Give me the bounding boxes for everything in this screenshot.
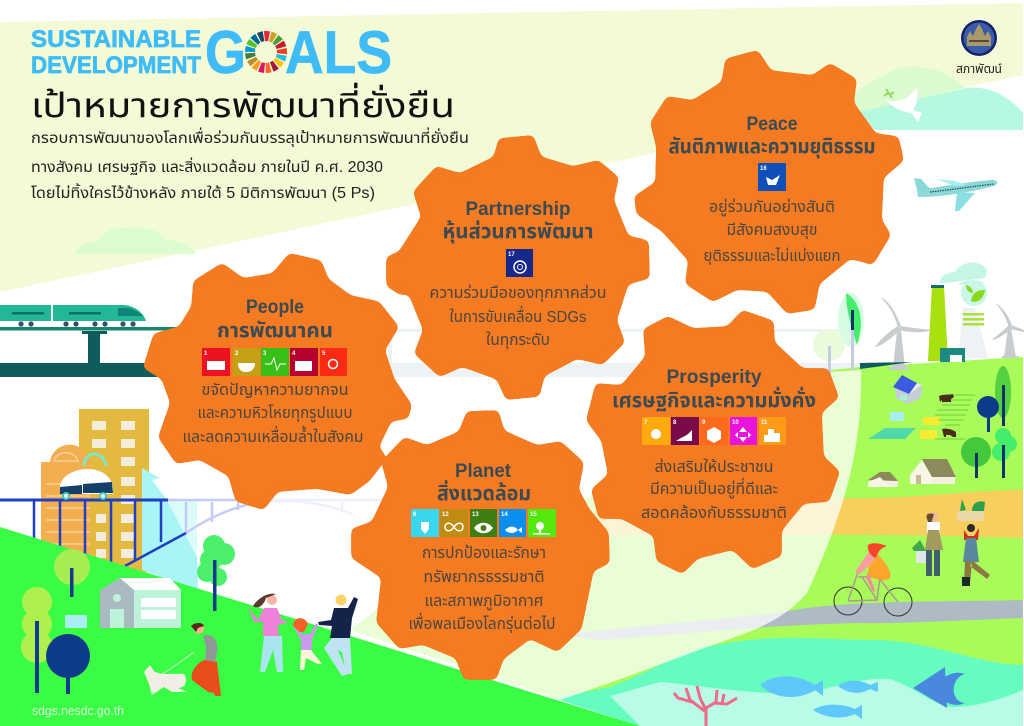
intro text: ทางสังคม เศรษฐกิจ และสิ่งแวดล้อม ภายในปี ค.ศ. 2030 <box>31 157 383 176</box>
fish <box>760 676 878 719</box>
clouds: top right hills <box>852 67 1023 130</box>
train <box>0 305 146 327</box>
field band <box>560 490 1023 538</box>
panel: planet: เพื่อพลเมืองโลกรุ่นต่อไป <box>408 612 556 633</box>
panel: planet: Planet <box>455 460 511 482</box>
intro text <box>31 127 469 202</box>
dark viaduct end <box>860 362 912 369</box>
logo: sustainable development goals: SUSTAINABLE <box>31 26 201 53</box>
big fish <box>913 667 965 708</box>
bridge: blue <box>0 498 385 566</box>
panel: peace: มีสังคมสงบสุข <box>726 222 818 239</box>
panel: people: ขจัดปัญหาความยากจน <box>202 382 348 399</box>
panel: partnership: ในการขับเคลื่อน SDGs <box>450 305 586 326</box>
farmer with basket <box>912 512 943 576</box>
gear: people <box>145 255 410 508</box>
panel: planet: ทรัพยากรธรรมชาติ <box>424 569 544 586</box>
farmer with crate <box>957 499 990 586</box>
train viaduct <box>0 327 180 377</box>
panel: peace: ยุติธรรมและไม่แบ่งแยก <box>704 247 840 265</box>
panel: peace: สันติภาพและความยุติธรรม <box>668 136 876 158</box>
logo: sustainable development goals: DEVELOPMENT <box>31 52 201 79</box>
panel: planet <box>408 460 556 633</box>
SDG tiles 6, 12 to 15: 15 <box>530 512 537 518</box>
SDG tiles 6, 12 to 15: 14 <box>501 512 508 518</box>
gear: prosperity <box>588 312 838 572</box>
trees near wind farm <box>813 293 864 376</box>
SDG tiles 7 to 11: 10 <box>732 420 739 426</box>
farm: solar house <box>893 375 922 404</box>
farm: houses <box>868 459 956 487</box>
SDG tiles 7 to 11 <box>642 417 786 445</box>
panel: prosperity: ส่งเสริมให้ประชาชน <box>654 458 774 476</box>
panel: planet: สิ่งแวดล้อม <box>437 480 531 505</box>
intro text: กรอบการพัฒนาของโลกเพื่อร่วมกันบรรลุเป้าหมายการพัฒนาที่ยั่งยืน <box>31 127 469 147</box>
SDG tiles 6, 12 to 15: 13 <box>472 512 479 518</box>
emblem: office of NESDC: สภาพัฒน์ <box>956 62 1002 76</box>
panel: peace: อยู่ร่วมกันอย่างสันติ <box>709 198 835 216</box>
panel: people: People <box>246 296 304 318</box>
SDG tiles 1 to 5 <box>202 348 347 376</box>
wind turbines <box>875 298 1024 370</box>
water: light wave <box>610 679 1023 726</box>
gear: peace <box>636 52 902 312</box>
panel: prosperity <box>612 366 816 522</box>
SDG tiles 7 to 11: 11 <box>761 420 768 426</box>
dog <box>144 665 187 695</box>
farm: fields, crops and cows <box>868 394 975 439</box>
panel: peace <box>668 113 876 265</box>
SDG tiles 7 to 11: 8 <box>673 420 677 426</box>
gear: partnership <box>388 137 648 398</box>
SDG tile 17 <box>506 249 533 277</box>
SDG tiles 1 to 5: 3 <box>263 351 267 357</box>
SDG tile 16 <box>758 163 786 191</box>
gear: planet <box>353 412 608 678</box>
tower building <box>79 409 149 572</box>
panel: people: และลดความเหลื่อมล้ำในสังคม <box>182 425 364 446</box>
dove <box>884 87 922 122</box>
smart car <box>60 454 113 499</box>
logo: sustainable development goals: ALS <box>285 19 392 86</box>
panel: prosperity: Prosperity <box>666 366 762 388</box>
website url: sdgs.nesdc.go.th <box>32 703 124 718</box>
orange building <box>41 445 90 560</box>
panel: partnership <box>430 198 606 349</box>
man walking dog <box>162 623 221 696</box>
SDG tiles 1 to 5: 4 <box>292 351 296 357</box>
trees on hill <box>21 535 235 694</box>
road <box>560 600 1023 640</box>
SDG tiles 7 to 11: 7 <box>644 420 648 426</box>
panel: prosperity: เศรษฐกิจและความมั่งคั่ง <box>612 387 816 412</box>
SDG tiles 1 to 5: 1 <box>204 351 208 357</box>
panel: prosperity: สอดคล้องกับธรรมชาติ <box>641 505 787 522</box>
factory <box>928 263 988 362</box>
house <box>100 578 181 628</box>
family holding hands <box>248 594 358 676</box>
SDG tiles 1 to 5: 2 <box>235 351 239 357</box>
panel: planet: และสภาพภูมิอากาศ <box>424 593 544 610</box>
title: เป้าหมายการพัฒนาที่ยั่งยืน <box>31 82 455 125</box>
bridge bands: distant <box>385 327 862 377</box>
intro text: โดยไม่ทิ้งใครไว้ข้างหลัง ภายใต้ 5 มิติการพัฒนา (5 Ps) <box>31 183 375 202</box>
panel: planet: การปกป้องและรักษา <box>422 544 546 562</box>
panel: partnership: Partnership <box>466 198 571 220</box>
panel: people <box>182 296 364 446</box>
pale overlay circle <box>350 370 861 726</box>
SDG tiles 6, 12 to 15: 12 <box>442 512 449 518</box>
logo: sustainable development goals: G <box>205 19 246 86</box>
panel: people: และความหิวโหยทุกรูปแบบ <box>198 405 352 422</box>
SDG tiles 1 to 5: 5 <box>322 351 326 357</box>
panel: people: การพัฒนาคน <box>217 320 333 342</box>
panel: partnership: หุ้นส่วนการพัฒนา <box>442 221 594 243</box>
SDG tiles 6, 12 to 15 <box>411 509 556 537</box>
glass building <box>142 468 198 590</box>
SDG tiles 7 to 11: 9 <box>702 420 706 426</box>
cloud: left <box>76 228 196 254</box>
right landscape: farmland base <box>350 357 1023 726</box>
background: pale sky <box>0 3 1023 292</box>
coral <box>674 686 737 726</box>
panel: prosperity: มีความเป็นอยู่ที่ดีและ <box>650 477 778 498</box>
farm: trees <box>961 366 1017 478</box>
panel: partnership: ในทุกระดับ <box>486 332 550 349</box>
SDG tile 17: 17 <box>508 252 515 258</box>
panel: peace: Peace <box>746 113 798 135</box>
water: mint wave <box>500 638 1023 726</box>
cyclist <box>834 543 912 616</box>
logo: sustainable development goals <box>31 19 392 86</box>
emblem: office of NESDC <box>956 20 1002 76</box>
SDG tile 16: 16 <box>760 166 767 172</box>
panel: partnership: ความร่วมมือของทุกภาคส่วน <box>430 284 606 302</box>
airplane <box>914 178 997 211</box>
green hill <box>0 527 640 726</box>
SDG tiles 6, 12 to 15: 6 <box>413 512 417 518</box>
